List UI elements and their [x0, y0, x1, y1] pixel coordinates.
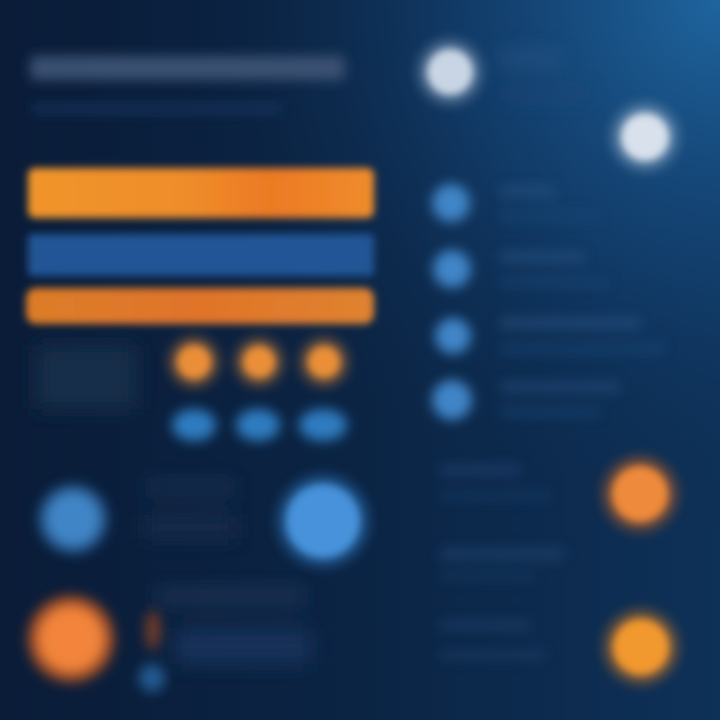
text block: lower right rows	[440, 465, 565, 660]
text block: centre label	[145, 482, 235, 539]
icon: amber circle lower right	[604, 610, 678, 684]
list: text lines	[500, 186, 665, 416]
icon: white circle top	[418, 40, 482, 104]
bullet 1	[432, 184, 470, 222]
icons: orange dots row	[169, 337, 348, 387]
text block: right of white circle	[500, 52, 590, 98]
bullet 2	[433, 250, 471, 288]
text block: left of indicator dots	[36, 345, 136, 409]
icon: small red and blue markers	[139, 610, 165, 692]
panel: stacked bars	[26, 168, 374, 324]
bar: lower orange	[26, 288, 374, 324]
icon: large orange circle	[27, 595, 115, 683]
icon: blue circle left	[37, 483, 109, 555]
icons: blue chips row	[172, 409, 347, 441]
icon: orange circle upper right	[603, 457, 677, 531]
title	[30, 56, 345, 113]
bar: top orange	[28, 168, 374, 218]
list: blue bullets	[432, 184, 472, 420]
text block: lower centre	[155, 590, 310, 664]
icon: large blue circle right	[277, 475, 369, 567]
bullet 3	[435, 318, 471, 354]
bullet 4	[432, 380, 472, 420]
icon: white circle right	[612, 104, 678, 170]
bar: middle blue	[28, 234, 374, 276]
